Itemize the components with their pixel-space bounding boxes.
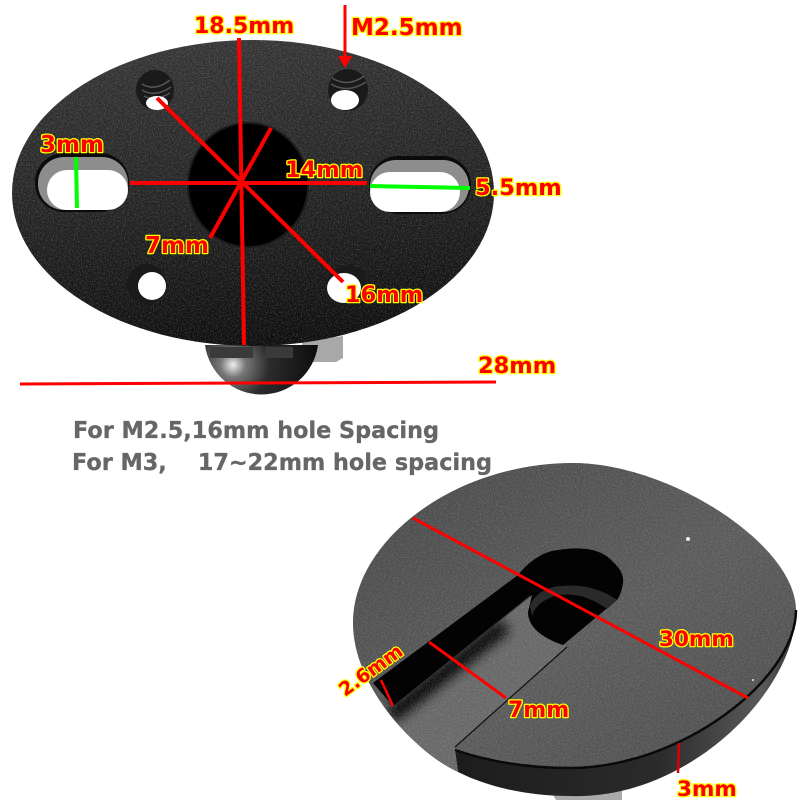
threaded hole: top left [136,70,174,110]
wall edge highlight [399,596,530,702]
label: 30mm: 30mm [659,627,734,652]
surface grain [353,463,796,772]
measurement line: 28mm overall width [20,382,496,384]
measurement line: 7mm slot [429,642,506,698]
label: 3mm: 3mm [40,132,104,158]
measurement lines: top plate [130,38,367,345]
measurement line: 3mm thickness [678,743,679,773]
photo: ball joint under top plate [205,336,343,394]
threaded hole: bottom right [326,266,368,306]
face edge shadow [455,610,796,768]
photo: top mounting plate [12,40,494,346]
slot floor [375,595,567,772]
cut seam [455,647,567,747]
note: hole spacing: For M2.5,16mm hole Spacing [73,418,439,444]
arrow: M2.5 thread callout [338,5,352,68]
label: 7mm lower: 7mm [508,698,569,723]
left slot [35,153,129,212]
label: M2.5mm: M2.5mm [351,15,463,41]
threaded hole: bottom left [127,264,167,304]
top face [353,463,796,772]
label: 28mm: 28mm [478,353,556,379]
label: 18.5mm: 18.5mm [194,14,294,39]
threaded hole: top right [328,69,368,111]
label: 7mm: 7mm [145,233,209,259]
label: 14mm: 14mm [285,157,363,183]
label: 5.5mm: 5.5mm [475,175,562,201]
bore lip [530,586,617,616]
specks [686,537,754,681]
green line: 5.5mm slot length [370,186,470,188]
measurement line: 30mm diameter [413,518,748,698]
centre bore [188,123,308,247]
label: 16mm: 16mm [345,282,423,308]
green line: 3mm slot width [76,157,77,208]
note: hole spacing: For M3, 17~22mm hole spacing [72,450,492,476]
slot wall and rounded end [373,548,623,706]
measurement line: 2.6mm wall [381,680,393,706]
note: hole spacing [72,418,492,476]
right slot [369,156,471,214]
screw stub [550,790,622,800]
rim [455,610,796,796]
photo: lower round plate [353,463,796,800]
label: 2.6mm: 2.6mm [335,640,407,701]
